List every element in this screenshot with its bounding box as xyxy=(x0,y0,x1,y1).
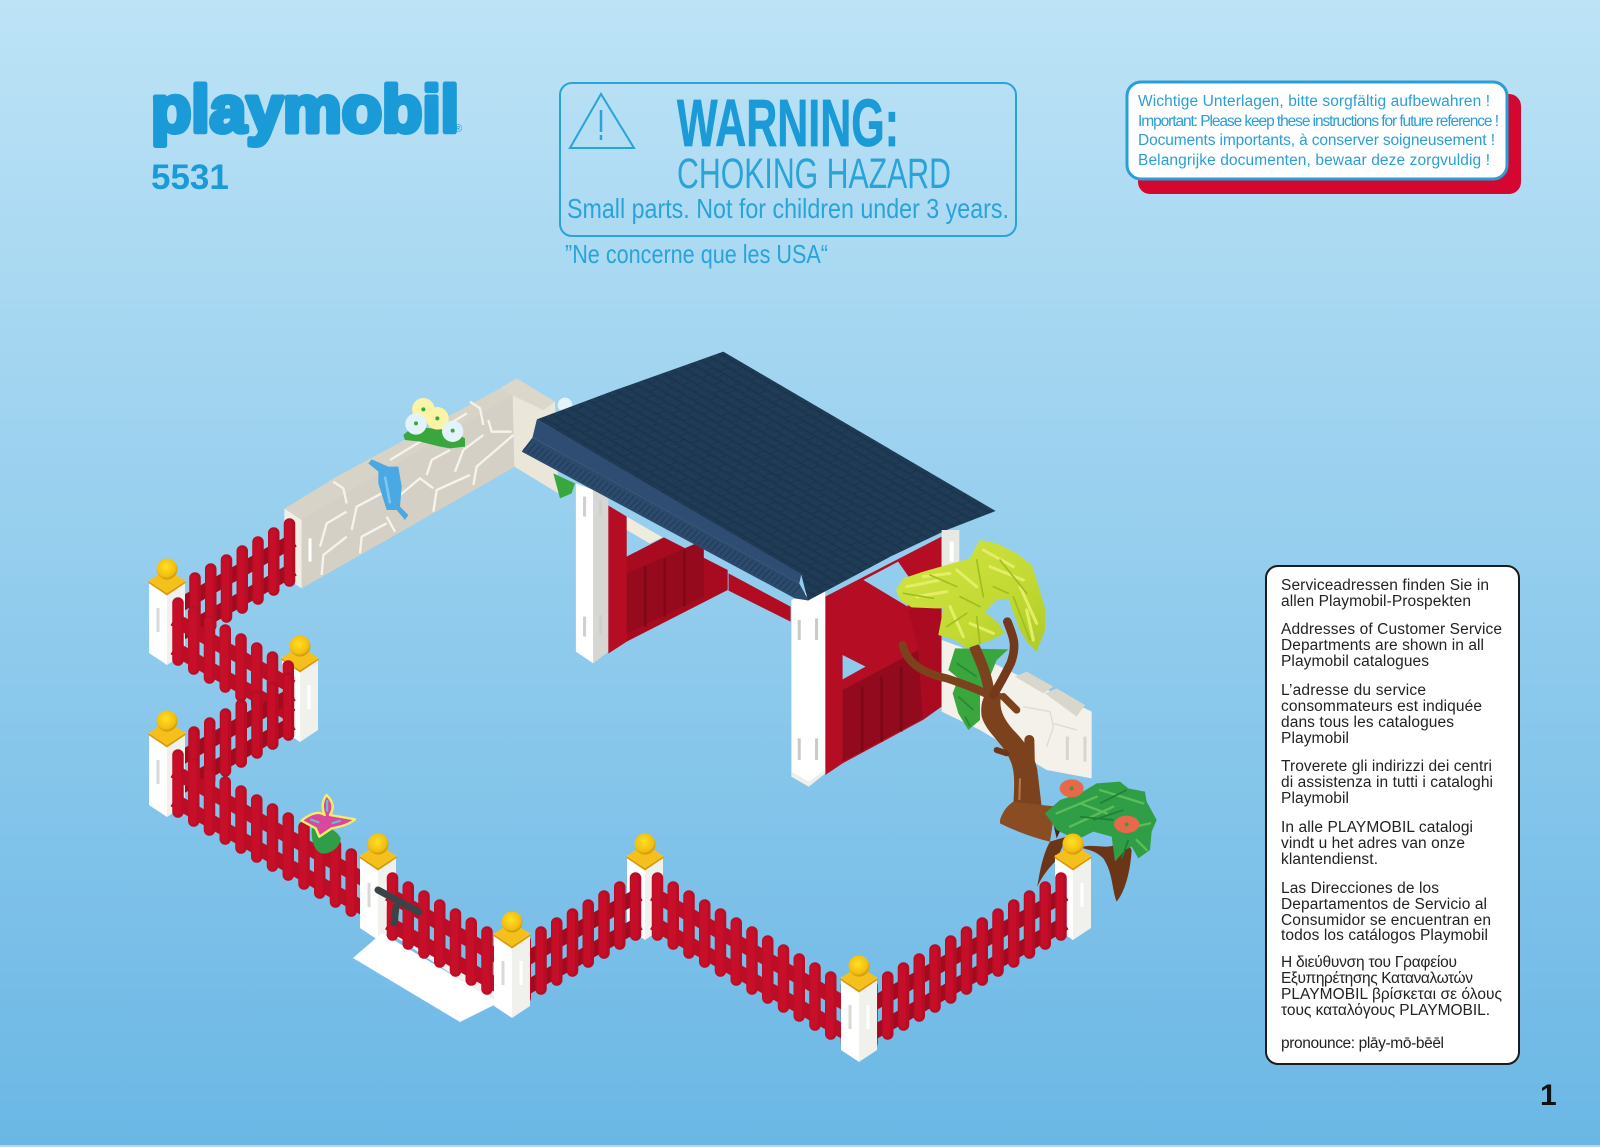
panel: keep documents notice xyxy=(1127,82,1521,194)
service text: Playmobil xyxy=(1281,790,1349,807)
service text: klantendienst. xyxy=(1281,851,1378,868)
fence: up to peak xyxy=(521,878,639,998)
service text: Εξυπηρέτησης Καταναλωτών xyxy=(1281,970,1473,987)
service text: τους καταλόγους PLAYMOBIL. xyxy=(1281,1002,1490,1019)
service text: L’adresse du service xyxy=(1281,682,1426,699)
right door xyxy=(825,537,941,775)
ramp xyxy=(353,925,494,1022)
post: right end xyxy=(1054,834,1092,940)
service text: Las Direcciones de los xyxy=(1281,880,1439,897)
roof xyxy=(522,352,996,601)
icon: flowers on wall xyxy=(403,398,465,448)
service text: Troverete gli indirizzi dei centri xyxy=(1281,758,1492,775)
logo: playmobil: ® xyxy=(454,123,462,135)
fence: top zigzag xyxy=(174,603,292,723)
fence: middle zigzag xyxy=(174,678,292,798)
service text: allen Playmobil-Prospekten xyxy=(1281,593,1471,610)
service text: Playmobil catalogues xyxy=(1281,653,1429,670)
notice text xyxy=(1138,93,1499,169)
fence: wall to corner post xyxy=(175,524,293,644)
service text: Serviceadressen finden Sie in xyxy=(1281,577,1489,594)
icon: butterfly on bush xyxy=(301,795,355,854)
set number: 5531 xyxy=(151,158,229,197)
notice text: Documents importants, à conserver soigneusement ! xyxy=(1138,132,1495,149)
post: peak xyxy=(626,834,664,940)
service text: vindt u het adres van onze xyxy=(1281,835,1465,852)
service text: Departamentos de Servicio al xyxy=(1281,896,1487,913)
service text: Consumidor se encuentran en xyxy=(1281,912,1491,929)
service text: PLAYMOBIL βρίσκεται σε όλους xyxy=(1281,986,1502,1003)
service text: dans tous les catalogues xyxy=(1281,714,1454,731)
notice text: Belangrijke documenten, bewaar deze zorgvuldig ! xyxy=(1138,152,1490,169)
choking hazard subheading: CHOKING HAZARD xyxy=(677,150,951,198)
left door xyxy=(608,506,791,653)
fence: long left run xyxy=(174,755,371,920)
fence: front to right xyxy=(868,878,1065,1043)
icon: vine leaf xyxy=(553,473,575,498)
icon: gate latch xyxy=(378,890,419,923)
service text: todos los catálogos Playmobil xyxy=(1281,927,1488,944)
icon: warning triangle xyxy=(570,94,634,148)
fence: peak to front corner xyxy=(654,878,850,1043)
tree trunk and branches xyxy=(903,622,1132,902)
USA note: ”Ne concerne que les USA“ xyxy=(565,239,828,269)
post: gate right xyxy=(494,912,530,1018)
tree with wall and bush xyxy=(896,530,1157,902)
service text: di assistenza in tutti i cataloghi xyxy=(1281,774,1493,791)
gate: stable with roof xyxy=(522,352,996,787)
left post xyxy=(576,483,608,663)
lower foliage xyxy=(948,648,1008,730)
notice text: Important: Please keep these instructions for future reference ! xyxy=(1138,113,1499,130)
page number: 1 xyxy=(1540,1079,1557,1112)
small parts text: Small parts. Not for children under 3 years. xyxy=(567,193,1009,224)
service text xyxy=(1281,577,1502,1052)
warning heading: WARNING: xyxy=(677,86,899,161)
stone wall xyxy=(284,378,575,588)
post: top left xyxy=(148,558,186,665)
logo: playmobil: playmobil xyxy=(151,72,459,146)
service text: consommateurs est indiquée xyxy=(1281,698,1482,715)
panel: choking hazard warning xyxy=(560,83,1016,236)
post: zigzag corner xyxy=(282,636,318,742)
front post xyxy=(791,590,825,787)
service text: Playmobil xyxy=(1281,730,1349,747)
service text: Departments are shown in all xyxy=(1281,637,1484,654)
upper foliage xyxy=(896,540,1045,652)
post: gate left xyxy=(360,834,396,940)
fence: gate section xyxy=(388,878,506,998)
panel: service addresses xyxy=(1266,566,1519,1064)
service text: Addresses of Customer Service xyxy=(1281,621,1502,638)
right stone wall xyxy=(942,530,1092,778)
bush with flowers xyxy=(1045,779,1157,862)
icon: blue water pump xyxy=(368,459,408,520)
notice text: Wichtige Unterlagen, bitte sorgfältig aufbewahren ! xyxy=(1138,93,1490,110)
service text: Η διεύθυνση του Γραφείου xyxy=(1281,954,1457,971)
post: left middle xyxy=(148,710,186,817)
red shadow xyxy=(1138,94,1521,194)
service text: In alle PLAYMOBIL catalogi xyxy=(1281,819,1473,836)
service text: pronounce: plāy-mō-bēēl xyxy=(1281,1035,1444,1052)
post: front corner xyxy=(840,956,878,1062)
